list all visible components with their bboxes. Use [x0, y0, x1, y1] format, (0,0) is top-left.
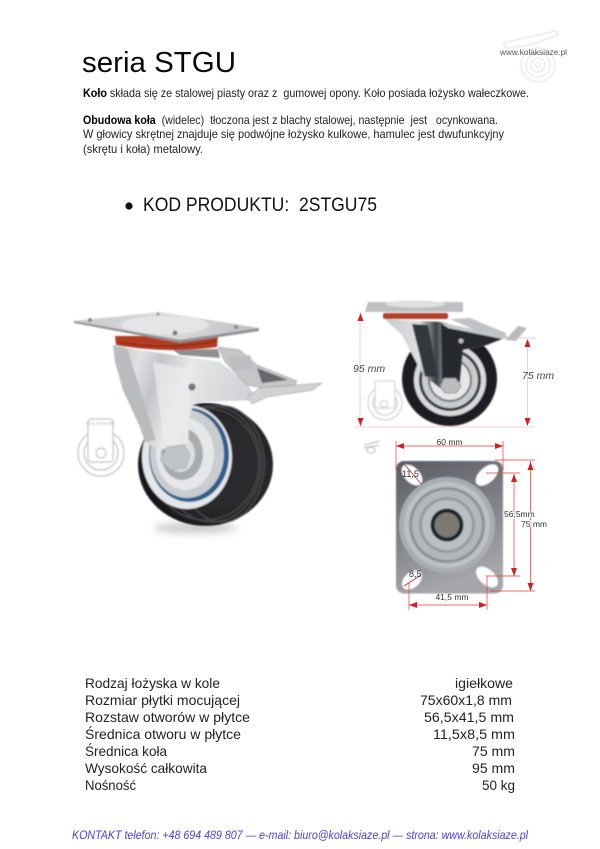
dimension: height 95 mm [353, 312, 535, 427]
row: total height: 95 mm [472, 760, 515, 776]
dimension: hole 11,5 [402, 465, 422, 485]
contact footer: KONTAKT telefon: +48 694 489 807 — e-mail: biuro@kolaksiaze.pl — strona: www.kolaksiaze.pl [72, 828, 528, 842]
dimension: hole 8,5 [404, 569, 422, 586]
dimension: hole spacing 56,5 mm: 56,5mm [504, 509, 535, 519]
bottom view of mounting plate [396, 460, 503, 594]
dimension: hole spacing 56,5 mm [486, 473, 535, 576]
logo watermark: www.kolaksiaze.pl [499, 47, 567, 57]
dimension: plate height 75 mm [490, 460, 547, 591]
brake pedal [247, 383, 322, 404]
dimension: hole 11,5: 11,5 [402, 469, 419, 479]
rim [142, 405, 232, 509]
dimension: plate width 60 mm [396, 437, 503, 470]
row: total height: Wysokość całkowita [85, 760, 207, 776]
brake lever [218, 347, 297, 388]
logo watermark [499, 31, 567, 82]
row: hole diameter: Średnica otworu w płytce [85, 725, 241, 742]
dimension: plate width 60 mm: 60 mm [437, 437, 462, 447]
red ring [115, 336, 218, 350]
dimension: height 95 mm: 95 mm [353, 363, 385, 375]
row: bearing type [85, 675, 513, 691]
row: wheel diameter: 75 mm [472, 743, 515, 759]
axle bolt [160, 445, 190, 470]
row: hole diameter: 11,5x8,5 mm [433, 726, 515, 742]
tyre [402, 331, 497, 426]
line: brake: (skrętu i koła) metalowy. [83, 142, 203, 156]
row: total height [85, 760, 515, 776]
central pin [430, 508, 464, 542]
row: load capacity [85, 777, 515, 793]
row: wheel diameter: Średnica koła [85, 742, 167, 759]
row: plate size [85, 692, 512, 708]
row: hole spacing: Rozstaw otworów w płytce [85, 709, 250, 725]
side view caster photo [365, 300, 527, 426]
dimension: hole spacing 41,5 mm: 41,5 mm [435, 592, 469, 602]
dimension: wheel 75 mm [505, 338, 554, 426]
fork [113, 345, 257, 450]
large caster photo [74, 312, 322, 533]
icon: small caster outline, side view [368, 381, 402, 420]
fork [385, 319, 507, 392]
row: bearing type: igiełkowe [455, 675, 513, 691]
tyre [138, 403, 273, 526]
holes [398, 460, 502, 593]
rim [414, 344, 486, 416]
icon: small top-view mark [364, 441, 380, 453]
row: hole spacing [85, 709, 514, 725]
line: swivel head: W głowicy skrętnej znajduje się podwójne łożysko kulkowe, hamulec jest dwufunkcyjny [83, 127, 504, 141]
shadow under ring [173, 349, 220, 358]
row: plate size: 75x60x1,8 mm [420, 692, 512, 708]
pressed rings [399, 477, 495, 573]
red ring [383, 313, 448, 319]
plate [396, 461, 503, 594]
product code: KOD PRODUKTU: 2STGU75 [143, 195, 377, 216]
ground shadow [153, 523, 237, 533]
row: bearing type: Rodzaj łożyska w kole [85, 675, 220, 691]
title: seria STGU [82, 47, 236, 79]
line: wheel description: Koło składa się ze stalowej piasty oraz z gumowej opony. Koło posiada łożysko wałeczkowe. [83, 86, 529, 100]
hub bolt [440, 378, 461, 393]
icon: small caster outline: KOLAKSIAZE [86, 421, 115, 426]
row: hole spacing: 56,5x41,5 mm [424, 709, 514, 725]
dimension: hole 8,5: 8,5 [409, 569, 422, 579]
mounting plate [74, 312, 259, 340]
brake [450, 318, 506, 338]
brake pedal [505, 326, 527, 341]
row: load capacity: 50 kg [482, 777, 515, 793]
dimension: hole spacing 41,5 mm [409, 576, 487, 610]
line: housing description: Obudowa koła (widelec) tłoczona jest z blachy stalowej, następnie jest ocynkowana. [83, 113, 498, 127]
mounting plate [365, 302, 463, 312]
specification table [85, 675, 515, 793]
row: hole diameter [85, 725, 515, 742]
dimension: wheel 75 mm: 75 mm [522, 370, 554, 382]
description text [83, 86, 529, 156]
row: wheel diameter [85, 742, 515, 759]
icon: small caster outline [78, 419, 124, 476]
row: load capacity: Nośność [85, 777, 136, 793]
row: plate size: Rozmiar płytki mocującej [85, 692, 240, 708]
dimension: plate height 75 mm: 75 mm [521, 519, 547, 529]
